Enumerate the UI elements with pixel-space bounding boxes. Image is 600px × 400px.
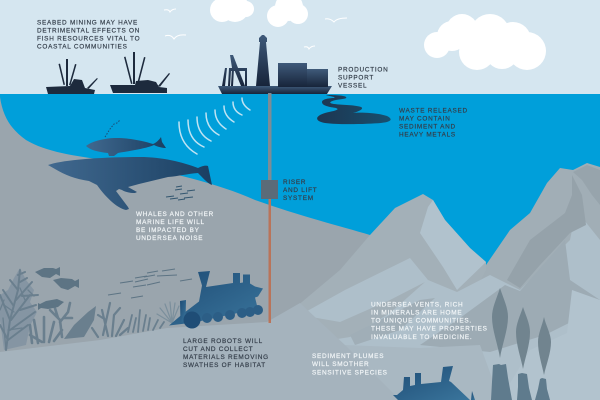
- label: large robots: [183, 338, 269, 369]
- label: whales: MARINE LIFE WILL: [136, 219, 205, 226]
- vent plumes: [492, 288, 551, 375]
- label: whales: UNDERSEA NOISE: [136, 235, 203, 242]
- sky: [0, 0, 600, 94]
- waste plume: [317, 95, 391, 124]
- robot: left: [169, 271, 263, 328]
- label: waste released: [399, 108, 468, 138]
- sea: [0, 94, 600, 400]
- label: sediment plumes: WILL SMOTHER: [312, 361, 369, 368]
- production support vessel: [218, 35, 332, 94]
- label: large robots: MATERIALS REMOVING: [183, 354, 269, 361]
- label: waste released: HEAVY METALS: [399, 132, 456, 138]
- label: undersea vents: IN MINERALS ARE HOME: [371, 310, 462, 316]
- label: riser and lift system: AND LIFT: [283, 187, 317, 194]
- label: production support vessel: VESSEL: [338, 82, 367, 90]
- label: seabed mining: FISH RESOURCES VITAL TO: [37, 36, 140, 42]
- label: riser and lift system: [283, 179, 317, 202]
- robot: right: [393, 366, 475, 400]
- fish school near whale: [166, 186, 195, 200]
- small whale: [86, 137, 166, 156]
- riser pipe lower: [268, 199, 271, 323]
- coral bush mass: [0, 268, 37, 350]
- shoal of fish: [108, 269, 192, 298]
- birds: [164, 9, 347, 49]
- label: production support vessel: [338, 66, 388, 90]
- mountain facets: light: [420, 200, 486, 290]
- rock creature silhouette: [64, 306, 96, 339]
- label: undersea vents: UNDERSEA VENTS, RICH: [371, 302, 463, 308]
- label: production support vessel: SUPPORT: [338, 74, 374, 82]
- label: undersea vents: THESE MAY HAVE PROPERTIES: [371, 326, 488, 332]
- label: large robots: CUT AND COLLECT: [183, 346, 253, 353]
- mountain: centre peak: [280, 194, 486, 400]
- cloud: top left: [210, 0, 254, 22]
- riser and lift system block: [261, 180, 278, 199]
- coral and reef silhouettes: [0, 268, 179, 350]
- label: undersea vents: [371, 302, 488, 341]
- label: production support vessel: PRODUCTION: [338, 66, 388, 74]
- label: whales: [136, 211, 214, 242]
- label: riser and lift system: RISER: [283, 179, 306, 186]
- fishing boat: left: [46, 59, 98, 94]
- label: undersea vents: TO UNIQUE COMMUNITIES.: [371, 318, 472, 324]
- label: waste released: SEDIMENT AND: [399, 124, 456, 130]
- label: seabed mining: COASTAL COMMUNITIES: [37, 44, 128, 50]
- cloud: top middle: [267, 0, 308, 27]
- cloud: large right: [424, 14, 546, 70]
- large whale: [48, 157, 212, 210]
- sound waves: [179, 98, 250, 154]
- label: seabed mining: [37, 20, 140, 50]
- label: large robots: LARGE ROBOTS WILL: [183, 338, 263, 345]
- bubbles: [105, 120, 120, 137]
- front seabed: [0, 303, 470, 400]
- label: large robots: SWATHES OF HABITAT: [183, 362, 266, 369]
- label: waste released: WASTE RELEASED: [399, 108, 468, 114]
- label: waste released: MAY CONTAIN: [399, 116, 451, 122]
- mountain: right peak: [420, 163, 600, 400]
- label: whales: BE IMPACTED BY: [136, 227, 200, 234]
- mountain facets: dark: [507, 175, 586, 288]
- label: seabed mining: DETRIMENTAL EFFECTS ON: [37, 28, 140, 34]
- label: whales: WHALES AND OTHER: [136, 211, 214, 218]
- label: sediment plumes: SEDIMENT PLUMES: [312, 353, 384, 360]
- label: seabed mining: SEABED MINING MAY HAVE: [37, 20, 138, 26]
- reef fish: [35, 267, 79, 310]
- seabed: left slope: [0, 97, 400, 400]
- hydrothermal vents: [491, 364, 550, 400]
- label: sediment plumes: SENSITIVE SPECIES: [312, 370, 388, 376]
- label: undersea vents: INVALUABLE TO MEDICINE.: [371, 334, 472, 341]
- fishing boat: middle: [110, 52, 170, 93]
- riser pipe upper: [268, 93, 272, 181]
- label: sediment plumes: [312, 353, 388, 376]
- label: riser and lift system: SYSTEM: [283, 195, 314, 202]
